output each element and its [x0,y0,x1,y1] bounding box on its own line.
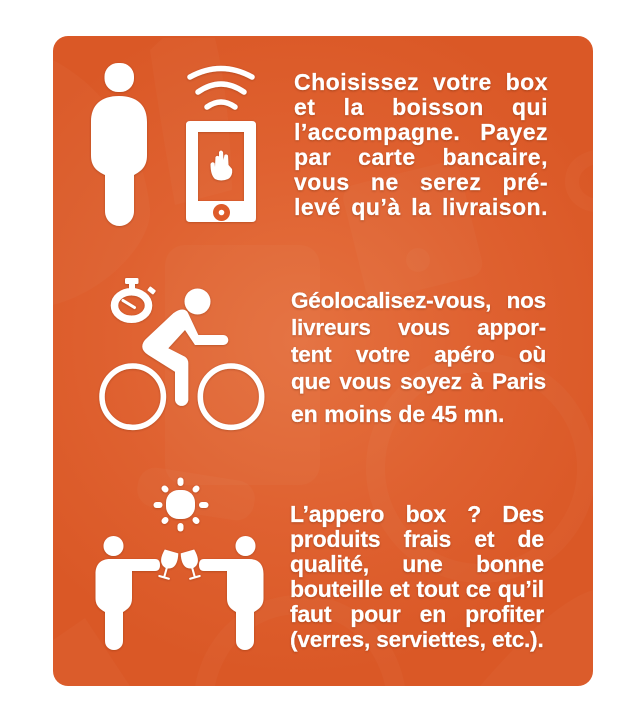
icon: left person toasting [96,536,160,650]
text block: geolocation and delivery: tent votre apéro où [291,342,546,367]
icon: cyclist [102,288,262,427]
text block: choose your box: par carte bancaire, [294,144,548,170]
icon: sun [156,480,206,528]
icon: smartphone with hand [186,121,256,222]
text block: choose your box: et la boisson qui [294,94,548,120]
icon: clinking wine glasses [156,549,203,580]
text block: choose your box: l’accompagne. Payez [294,119,548,145]
text block: geolocation and delivery: livreurs vous appor- [291,315,546,340]
text block: geolocation and delivery: en moins de 45 mn. [291,401,504,427]
text block: choose your box: vous ne serez pré- [294,169,548,195]
text block: about the box: bouteille et tout ce qu’il [290,576,544,602]
icon: standing person [91,63,147,226]
icon: right person toasting [199,536,264,650]
text block: about the box: (verres, serviettes, etc.). [290,627,544,652]
text block: geolocation and delivery: Géolocalisez-vous, nos [291,288,546,313]
text block: about the box: produits frais et de [290,526,544,552]
text block: choose your box [294,69,548,222]
text block: choose your box: levé qu’à la livraison. [294,194,548,220]
text block: about the box: L’appero box ? Des [290,501,544,527]
text block: geolocation and delivery [290,288,546,427]
text block: about the box: qualité, une bonne [290,551,544,577]
text block: geolocation and delivery: que vous soyez à Paris [291,369,546,394]
icon: stopwatch [114,278,156,319]
text block: about the box [290,501,545,654]
text block: choose your box: Choisissez votre box [294,69,548,95]
text block: about the box: faut pour en profiter [290,601,544,627]
panel: orange background [53,36,596,686]
icon: wifi waves [190,68,252,107]
